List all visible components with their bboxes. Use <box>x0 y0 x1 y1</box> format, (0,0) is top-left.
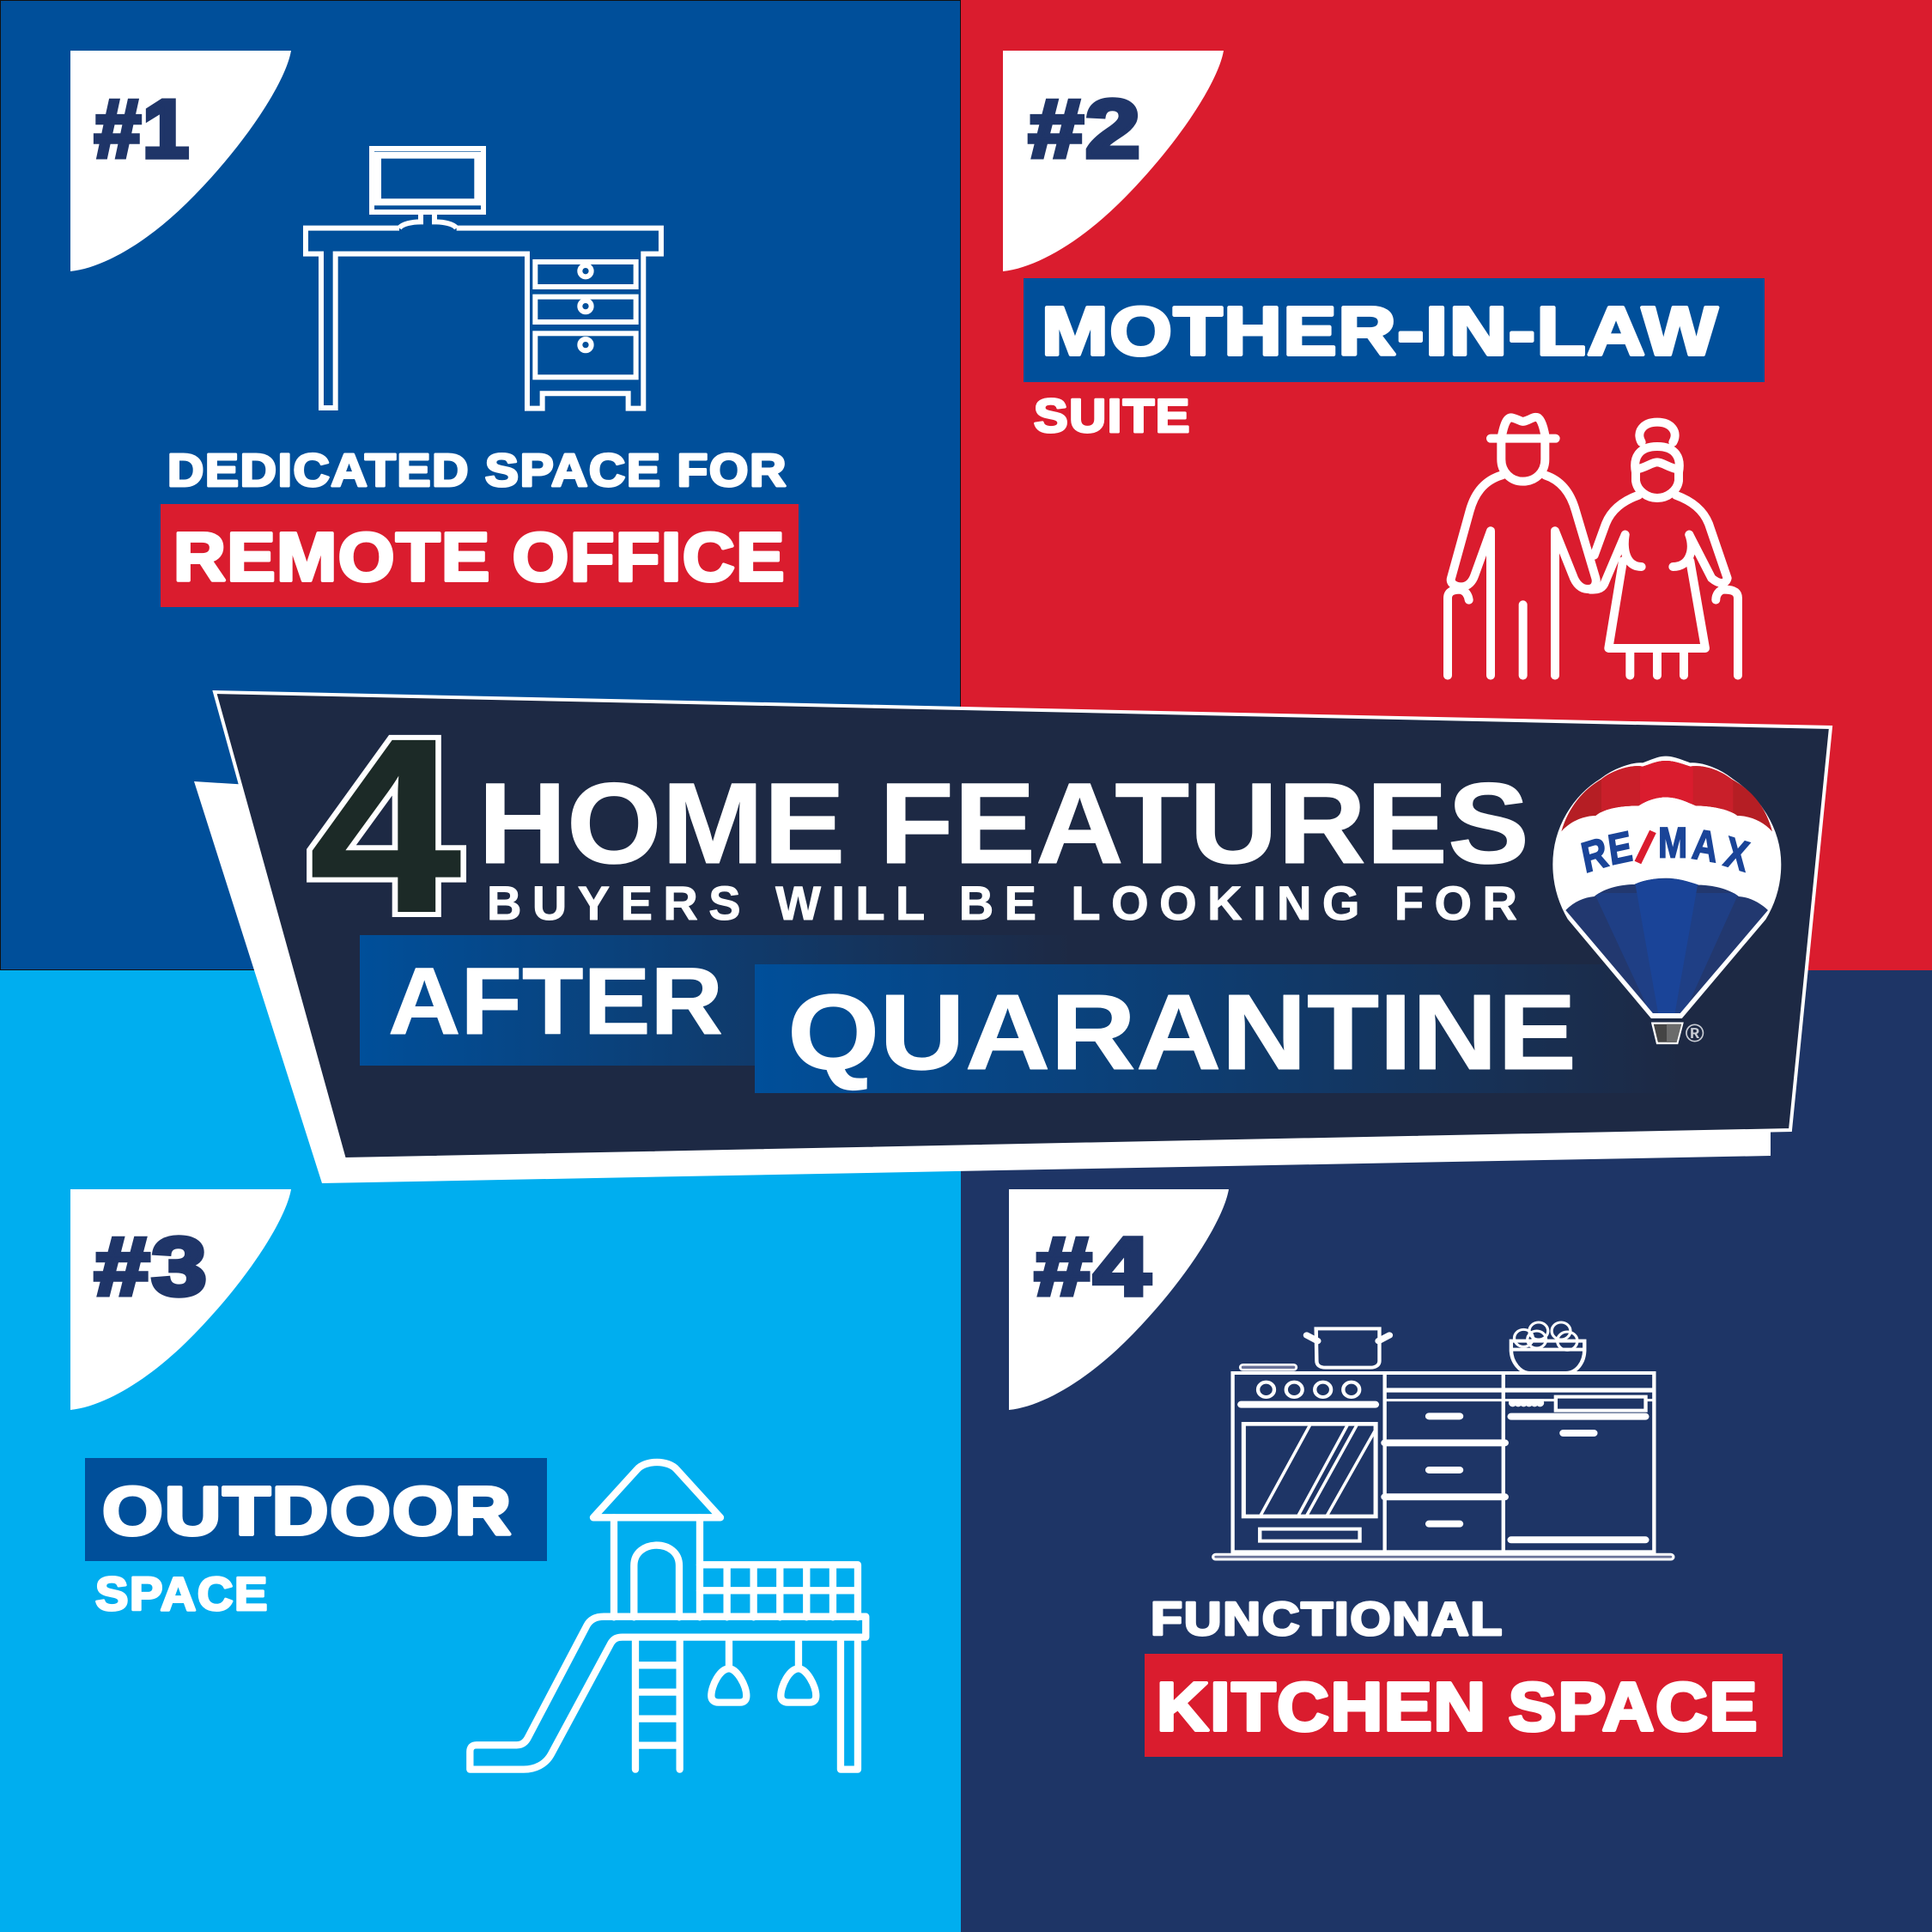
badge: #1 <box>70 51 291 271</box>
icon: playground <box>470 1462 866 1770</box>
numeral 4: 4 <box>309 688 463 964</box>
label: space: SPACE <box>95 1567 269 1620</box>
highlight: mother-in-law <box>1024 278 1765 382</box>
logo wordmark: RE/MAX <box>1577 818 1753 882</box>
highlight: remote office: REMOTE OFFICE <box>173 519 786 595</box>
highlight: outdoor <box>85 1458 547 1561</box>
highlight: remote office <box>161 504 799 607</box>
banner shadow <box>194 781 1771 1183</box>
numeral 4: 4 <box>309 688 463 964</box>
badge: #1: #1 <box>94 83 191 175</box>
highlight: after <box>360 935 1072 1066</box>
logo: RE/MAX balloon <box>1553 756 1783 1048</box>
highlight: kitchen space <box>1145 1654 1783 1757</box>
badge: #2: #2 <box>1029 83 1142 175</box>
icon: elderly couple <box>1448 417 1738 676</box>
panel: #4 kitchen space <box>961 970 1932 1932</box>
highlight: after: AFTER <box>388 949 723 1054</box>
subheading: BUYERS WILL BE LOOKING FOR <box>487 876 1517 930</box>
badge: #4: #4 <box>1035 1221 1152 1313</box>
panel: #2 mother-in-law suite <box>961 0 1932 970</box>
label: dedicated space for: DEDICATED SPACE FOR <box>167 445 787 496</box>
label: suite: SUITE <box>1034 389 1191 442</box>
highlight: mother-in-law: MOTHER-IN-LAW <box>1042 293 1719 369</box>
badge: #3 <box>70 1189 291 1410</box>
heading: home features: HOME FEATURES <box>478 760 1529 888</box>
logo basket <box>1652 1019 1704 1048</box>
panel: #3 outdoor space <box>0 970 961 1932</box>
label: functional: FUNCTIONAL <box>1151 1592 1504 1645</box>
highlight: quarantine: QUARANTINE <box>787 973 1577 1092</box>
highlight: kitchen space: KITCHEN SPACE <box>1157 1668 1759 1745</box>
title banner <box>215 688 1831 1159</box>
badge: #4 <box>1009 1189 1229 1410</box>
panel: #1 remote office <box>0 0 961 970</box>
badge: #2 <box>1003 51 1224 271</box>
icon: kitchen <box>1213 1322 1674 1559</box>
highlight: outdoor: OUTDOOR <box>102 1473 513 1549</box>
badge: #3: #3 <box>94 1221 209 1313</box>
logo basket: ® <box>1686 1019 1704 1048</box>
icon: desk with monitor <box>306 149 661 409</box>
